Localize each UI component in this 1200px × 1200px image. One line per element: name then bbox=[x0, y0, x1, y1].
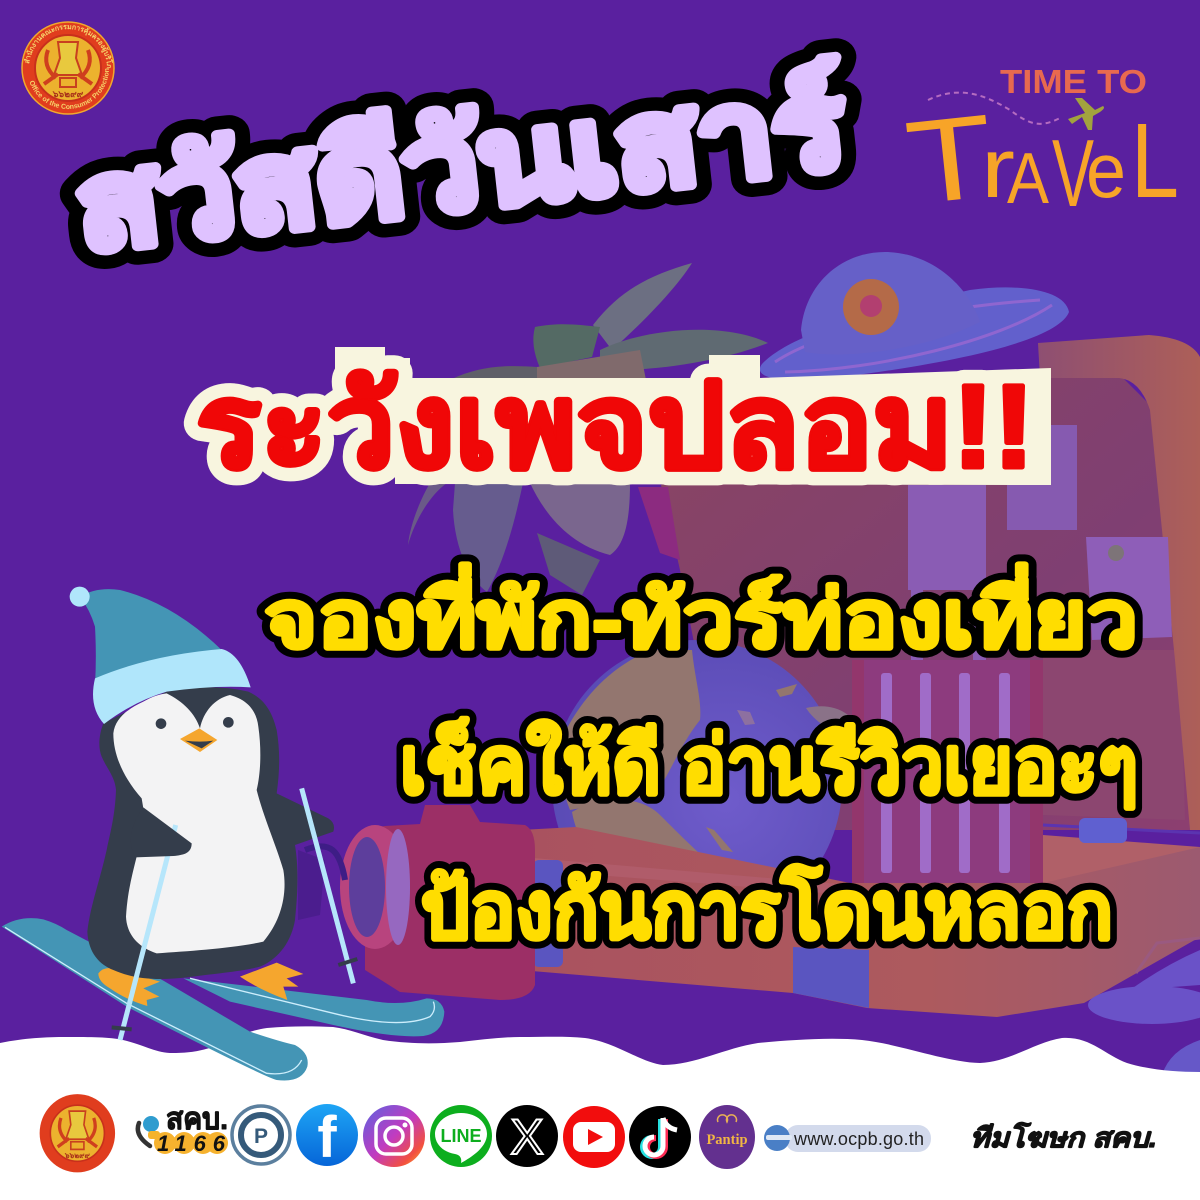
hotline 1166 bbox=[138, 1103, 228, 1156]
heading: beware of fake pages: ระวังเพจปลอม!! bbox=[196, 361, 1034, 493]
beak bbox=[180, 728, 217, 752]
suitcase handle panel bbox=[852, 660, 1043, 885]
icon: Facebook bbox=[296, 1104, 358, 1170]
cream backing bbox=[395, 355, 1051, 485]
top-left seal logo: ๖๖๒๙๙ bbox=[52, 89, 84, 99]
background illustration: travel suitcase scene bbox=[298, 252, 1200, 1080]
suitcase base bbox=[1043, 835, 1200, 885]
logo: Time to Travel bbox=[900, 63, 1179, 230]
message line 1: จองที่พัก-ทัวร์ท่องเที่ยว bbox=[264, 563, 1138, 664]
palm leaves bbox=[408, 263, 768, 595]
suitcase lid interior bbox=[661, 375, 1190, 830]
travel text: e bbox=[1086, 126, 1126, 214]
right ski pole bbox=[302, 788, 353, 983]
corner protectors bbox=[533, 860, 563, 967]
flight path bbox=[928, 93, 1060, 124]
icon: X bbox=[496, 1105, 558, 1167]
suitcase lid frame bbox=[1038, 335, 1200, 830]
title: greeting: สวัสดีวันเสาร์ bbox=[70, 56, 852, 276]
travel text: T bbox=[900, 90, 1000, 230]
feet bbox=[98, 968, 160, 1006]
message line 1: จองที่พัก-ทัวร์ท่องเที่ยว bbox=[264, 563, 1138, 664]
icon: X: X bbox=[510, 1109, 544, 1165]
message line 3: ป้องกันการโดนหลอก bbox=[421, 863, 1113, 955]
travel text: r bbox=[981, 121, 1015, 215]
icon: Facebook: f bbox=[317, 1105, 337, 1170]
icon: LINE bbox=[430, 1105, 492, 1167]
plane icon bbox=[1068, 98, 1104, 130]
website address: www.ocpb.go.th bbox=[793, 1129, 924, 1149]
hat bbox=[80, 589, 222, 685]
body bbox=[87, 687, 334, 979]
skis bbox=[2, 918, 308, 1081]
heading: beware of fake pages: ระวังเพจปลอม!! bbox=[196, 361, 1034, 493]
camera strap bbox=[305, 846, 345, 880]
top-left seal logo bbox=[21, 21, 115, 115]
icon: globe bbox=[764, 1125, 790, 1151]
hat flower bbox=[843, 279, 899, 335]
travel text: A bbox=[1007, 139, 1049, 219]
eyes bbox=[156, 718, 166, 729]
icon: YouTube bbox=[563, 1106, 625, 1168]
icon: LINE: LINE bbox=[440, 1126, 482, 1146]
message line 2: เช็คให้ดี อ่านรีวิวเยอะๆ bbox=[400, 717, 1138, 810]
icon: TikTok bbox=[629, 1106, 691, 1168]
lid pockets bbox=[1007, 425, 1077, 530]
travel text: V bbox=[1052, 120, 1094, 227]
team credit: ทีมโฆษก สคบ. bbox=[970, 1121, 1157, 1153]
wing bbox=[131, 807, 192, 857]
footer seal logo: ๖๖๒๙๙ bbox=[64, 1151, 90, 1160]
icon: Pantip: Pantip bbox=[706, 1132, 748, 1148]
travel text: L bbox=[1131, 102, 1179, 220]
penguin skier bbox=[2, 587, 444, 1081]
camera bbox=[365, 805, 535, 1000]
icon: OCPB website ring bbox=[232, 1106, 290, 1164]
icon: Instagram bbox=[363, 1105, 425, 1167]
travel text bbox=[900, 90, 1179, 230]
suitcase clasp bbox=[1043, 825, 1200, 833]
hotline label: สคบ. bbox=[166, 1103, 228, 1136]
message line 3: ป้องกันการโดนหลอก bbox=[421, 863, 1113, 955]
left ski pole bbox=[120, 825, 176, 1040]
time to text: TIME TO bbox=[1000, 63, 1147, 100]
message line 2: เช็คให้ดี อ่านรีวิวเยอะๆ bbox=[400, 717, 1138, 810]
number pills bbox=[154, 1132, 228, 1154]
flip flop bbox=[1088, 986, 1200, 1024]
phone icon bbox=[138, 1123, 150, 1146]
white wave footer bbox=[0, 1026, 1200, 1200]
footer seal logo bbox=[40, 1094, 115, 1172]
title: greeting: สวัสดีวันเสาร์ bbox=[70, 56, 852, 276]
hotline 1166: 1166 bbox=[157, 1131, 226, 1156]
belly and face bbox=[113, 693, 285, 953]
website pill bbox=[764, 1125, 931, 1152]
icon: Pantip bbox=[699, 1105, 755, 1169]
globe bbox=[552, 640, 842, 930]
sun hat bbox=[760, 287, 1069, 380]
icon: OCPB website ring: P bbox=[254, 1125, 268, 1148]
